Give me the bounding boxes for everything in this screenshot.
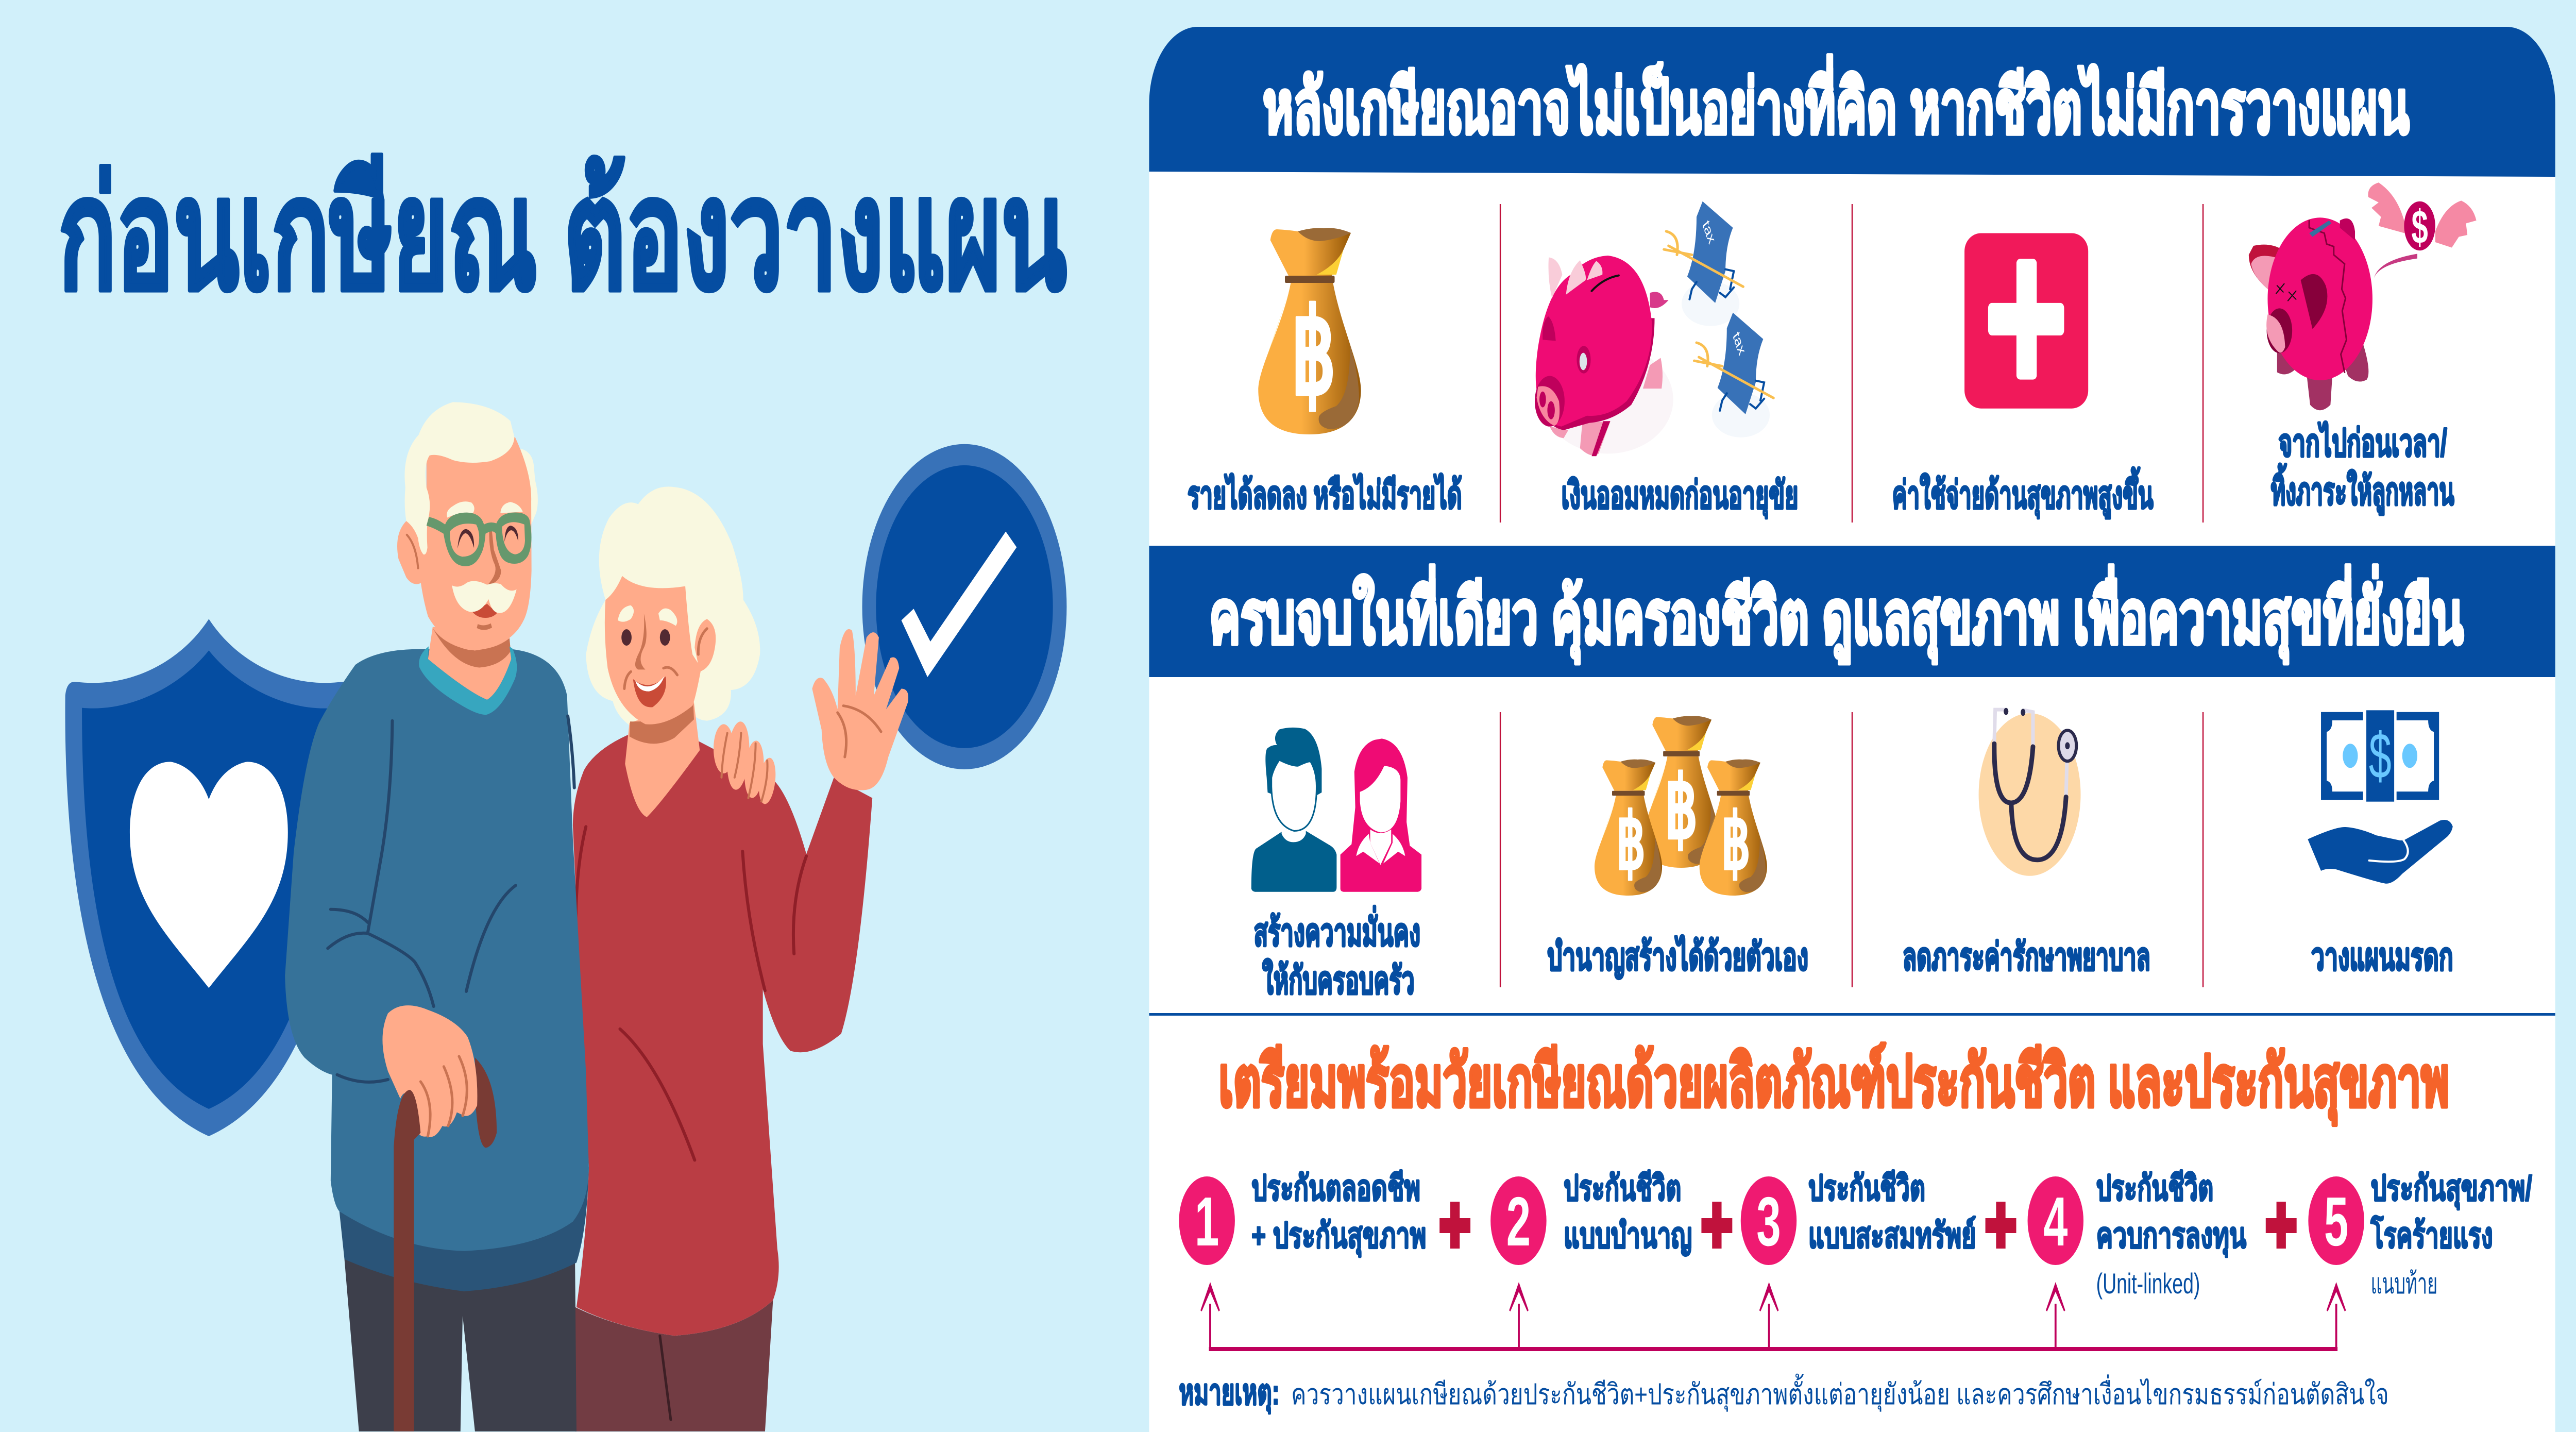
plus sign 1	[1439, 1202, 1470, 1249]
product 5: แนบท้าย	[2370, 1268, 2437, 1300]
heading 2: ครบจบในที่เดียว คุ้มครองชีวิต ดูแลสุขภาพ เพื่อความสุขที่ยั่งยืน	[1209, 565, 2464, 664]
icon: banknote on hand	[2308, 710, 2453, 884]
product 1: + ประกันสุขภาพ	[1251, 1217, 1426, 1257]
caption: family security	[1253, 905, 1420, 1002]
icon: falling piggy bank and tax demons	[1535, 201, 1773, 456]
product 5: โรคร้ายแรง	[2370, 1214, 2493, 1256]
product 5: ประกันสุขภาพ/	[2370, 1169, 2532, 1210]
product 2	[1490, 1169, 1692, 1265]
note: ควรวางแผนเกษียณด้วยประกันชีวิต+ประกันสุขภาพตั้งแต่อายุยังน้อย และควรศึกษาเงื่อนไขกรมธรรม์ก่อนตัดสินใจ	[1291, 1373, 2389, 1412]
product 1	[1179, 1169, 1426, 1265]
caption: medical burden: ลดภาระค่ารักษาพยาบาล	[1903, 936, 2150, 979]
icon: stethoscope	[1979, 708, 2081, 876]
icon: money bag: ฿	[1291, 288, 1336, 418]
icon: banknote on hand: $	[2369, 720, 2392, 793]
product 4: (Unit-linked)	[2096, 1268, 2200, 1300]
product 5: 5	[2324, 1183, 2348, 1260]
product 2: 2	[1506, 1183, 1531, 1260]
caption: pension: บำนาญสร้างได้ด้วยตัวเอง	[1548, 935, 1808, 979]
note	[1179, 1373, 2389, 1414]
icon: money bag	[1258, 228, 1361, 434]
icon: broken piggy bank with flying coin	[2249, 182, 2477, 410]
icon: three money bags: ฿	[1721, 800, 1751, 885]
icon: three money bags	[1595, 716, 1767, 896]
product 3	[1741, 1169, 1976, 1265]
product 5	[2308, 1169, 2532, 1300]
plus sign 2	[1701, 1202, 1732, 1249]
hand on shoulder	[714, 721, 778, 805]
title: ก่อนเกษียณ ต้องวางแผน	[59, 149, 1066, 322]
icon: falling piggy bank and tax demons: tax	[1730, 329, 1748, 359]
icon: medical cross	[1964, 233, 2088, 409]
icon: falling piggy bank and tax demons: tax	[1700, 217, 1718, 247]
product 4: ประกันชีวิต	[2096, 1169, 2213, 1208]
product 2: ประกันชีวิต	[1564, 1169, 1681, 1208]
plus sign 3	[1986, 1202, 2016, 1249]
man's head	[397, 402, 538, 715]
plus sign 4	[2266, 1202, 2297, 1249]
product 1: 1	[1195, 1183, 1219, 1260]
waving hand	[812, 629, 908, 790]
product 1: ประกันตลอดชีพ	[1251, 1169, 1420, 1208]
caption: family security: สร้างความมั่นคง	[1253, 905, 1420, 954]
product 2: แบบบำนาญ	[1564, 1217, 1692, 1256]
product 4	[2028, 1169, 2246, 1300]
note: หมายเหตุ:	[1179, 1373, 1279, 1414]
icon: three money bags: ฿	[1665, 761, 1698, 856]
illustration: older man with cane	[285, 402, 589, 1431]
caption: income: รายได้ลดลง หรือไม่มีรายได้	[1188, 473, 1462, 517]
caption: passing early: จากไปก่อนเวลา/	[2278, 421, 2447, 465]
caption: passing early	[2271, 421, 2454, 515]
caption: estate planning: วางแผนมรดก	[2311, 936, 2453, 979]
product 3: 3	[1756, 1183, 1781, 1260]
heading 3: เตรียมพร้อมวัยเกษียณด้วยผลิตภัณฑ์ประกันชีวิต และประกันสุขภาพ	[1218, 1043, 2449, 1125]
header band 2	[1149, 546, 2555, 677]
product 3: แบบสะสมทรัพย์	[1808, 1216, 1976, 1256]
heading 1: หลังเกษียณอาจไม่เป็นอย่างที่คิด หากชีวิตไม่มีการวางแผน	[1263, 55, 2410, 149]
caption: savings: เงินออมหมดก่อนอายุขัย	[1562, 474, 1798, 518]
product 3: ประกันชีวิต	[1808, 1169, 1925, 1208]
product 4: 4	[2043, 1183, 2068, 1260]
icon: three money bags: ฿	[1616, 800, 1646, 885]
product 4: ควบการลงทุน	[2096, 1217, 2246, 1257]
caption: health costs: ค่าใช้จ่ายด้านสุขภาพสูงขึ้น	[1892, 467, 2154, 518]
illustration: older woman	[573, 486, 908, 1431]
illustration: check badge	[862, 444, 1066, 769]
panel: right information card	[1149, 27, 2555, 1432]
arrows connecting products	[1200, 1282, 2346, 1351]
header band 1	[1149, 27, 2555, 177]
illustration: shield with heart	[65, 619, 352, 1136]
icon: couple	[1251, 728, 1421, 892]
caption: passing early: ทิ้งภาระให้ลูกหลาน	[2271, 463, 2454, 515]
caption: family security: ให้กับครอบครัว	[1262, 958, 1415, 1002]
icon: broken piggy bank with flying coin: $	[2412, 200, 2428, 254]
